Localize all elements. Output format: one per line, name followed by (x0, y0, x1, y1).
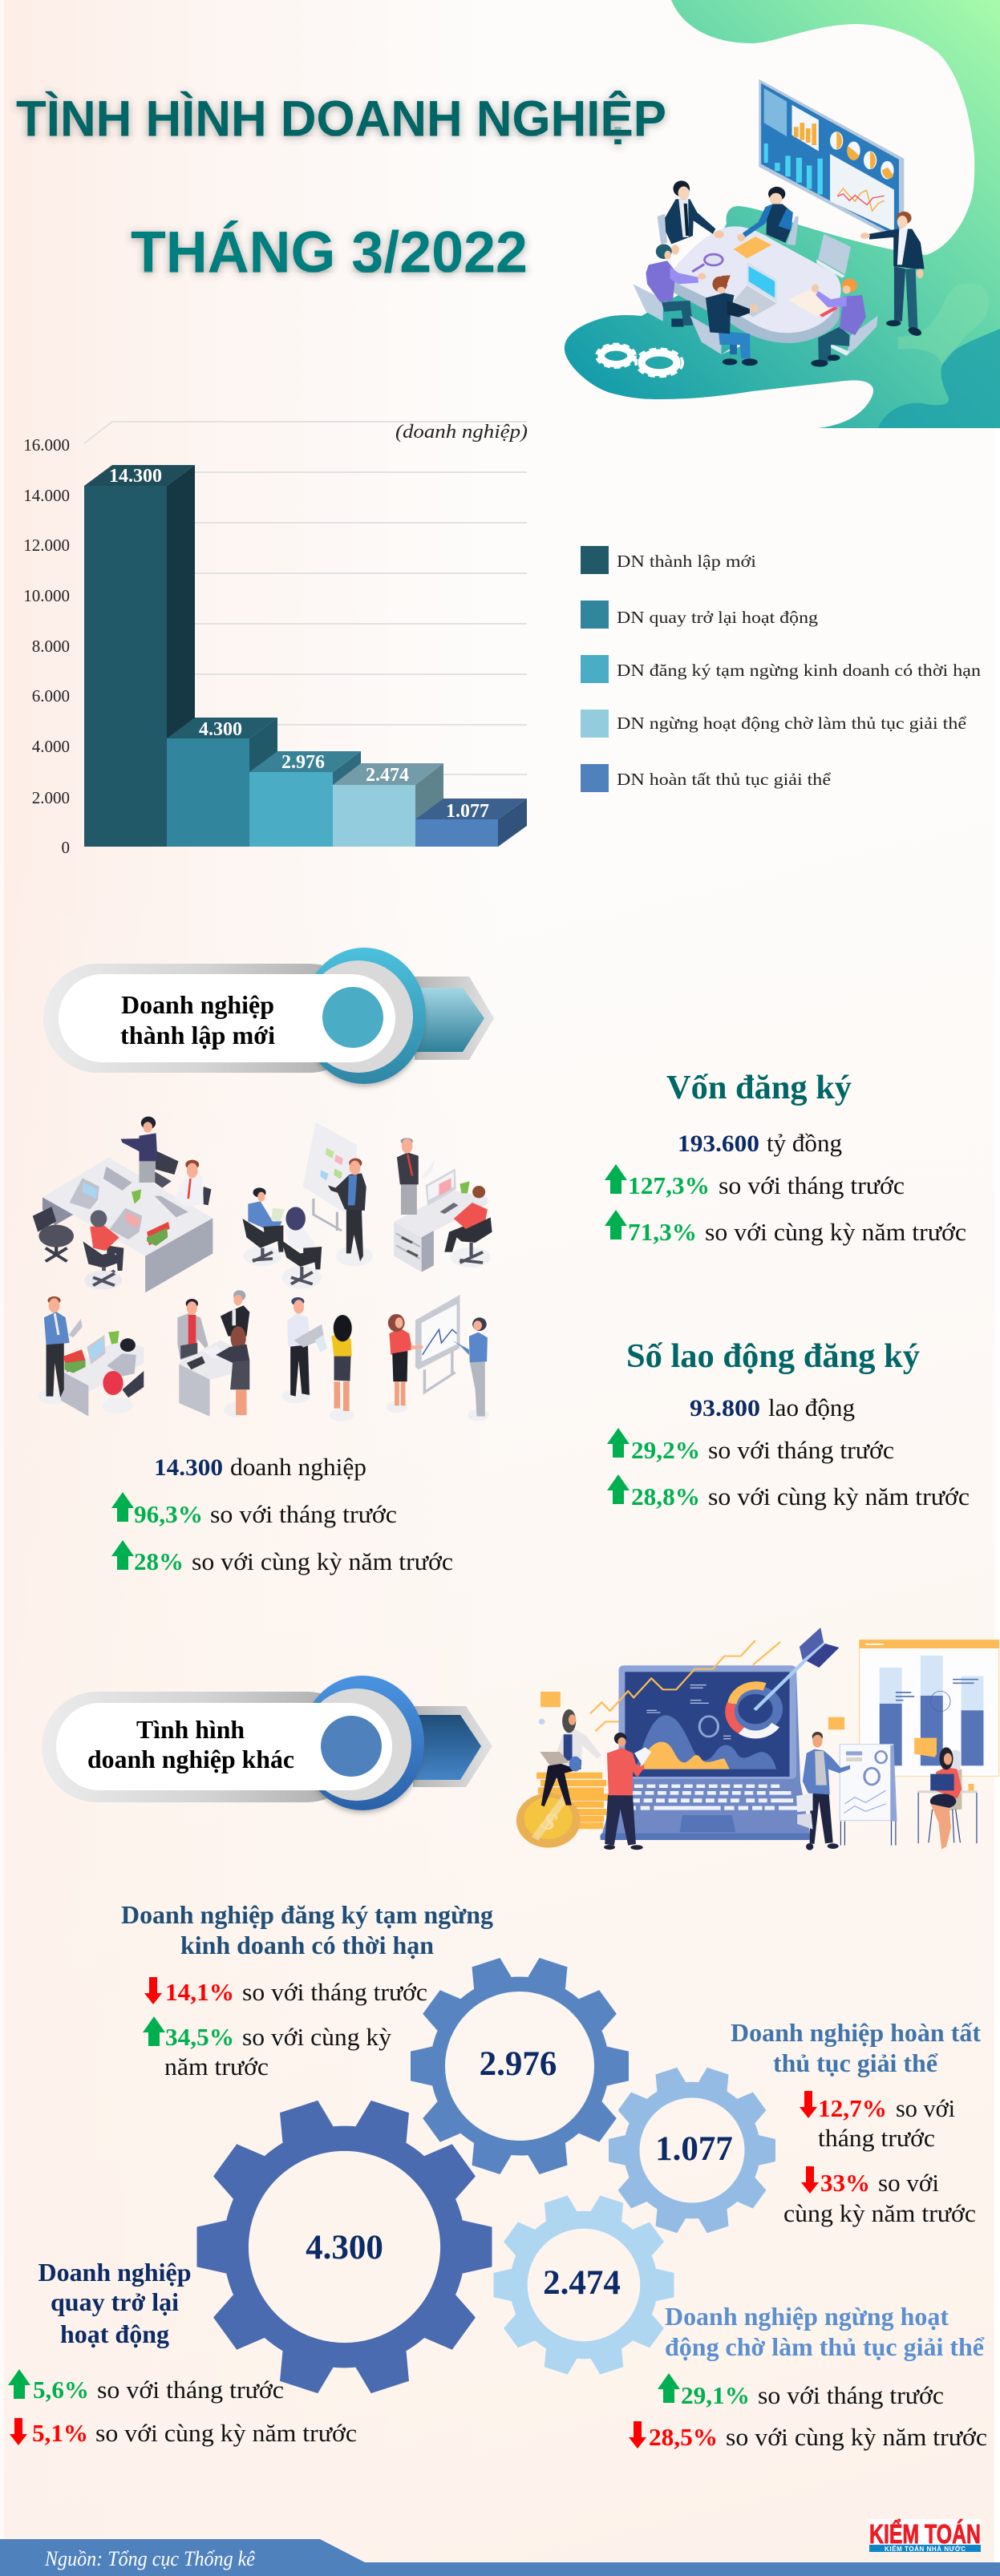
block: ngừng hoạt động chờ giải thể (629, 2302, 987, 2451)
stat: 28,8% (607, 1474, 970, 1510)
icon: seated man top (737, 187, 799, 245)
value: 14.300 (154, 1454, 223, 1481)
axis labels: 14.000 (23, 486, 70, 505)
value: 93.800 (690, 1395, 760, 1421)
data labels: 2.474 (366, 765, 409, 786)
stat: 12,7%: so với (896, 2094, 955, 2122)
stat: 96,3%: 96,3% (134, 1500, 203, 1528)
icon: presenter and flipchart (796, 1717, 897, 1850)
stat: 33%: cùng kỳ năm trước (783, 2199, 976, 2227)
stat: 96,3%: so với tháng trước (210, 1500, 397, 1528)
value (154, 1453, 366, 1481)
gear numbers: 2.976 (480, 2045, 557, 2083)
icon: chart board with two women (387, 1295, 489, 1421)
data labels: 1.077 (446, 801, 489, 822)
stat: 127,3% (605, 1164, 905, 1199)
data labels: 2.976 (281, 752, 325, 773)
section badge: Tình hình doanh nghiệp khác (42, 1676, 492, 1810)
bar: 2.474 (333, 763, 443, 847)
icon: seated woman at desk (914, 1738, 978, 1850)
heading: Doanh nghiệp ngừng hoạt (665, 2302, 949, 2331)
chart: 3D bar chart of enterprises (23, 422, 528, 857)
value: lao động (768, 1393, 855, 1421)
axis labels: 16.000 (23, 435, 70, 455)
heading: thủ tục giải thể (773, 2048, 938, 2077)
bar: 4.300 (167, 718, 277, 847)
title line 2 reflection (141, 269, 528, 273)
gear: 2.474 (494, 2194, 674, 2376)
legend: DN đăng ký tạm ngừng kinh doanh có thời hạn (617, 661, 982, 680)
axis labels: 2.000 (32, 788, 70, 807)
stat: 29,2% (607, 1428, 894, 1464)
arrow (415, 977, 494, 1060)
stat: 96,3% (111, 1492, 397, 1528)
badge text (120, 990, 275, 1049)
heading (121, 1900, 493, 1959)
icon: big chart board (860, 1640, 999, 1776)
legend: DN quay trở lại hoạt động (617, 608, 819, 627)
axis labels: 10.000 (23, 586, 70, 605)
axis labels: 4.000 (32, 737, 70, 756)
data labels: 4.300 (199, 719, 242, 740)
data labels: 14.300 (109, 466, 162, 487)
axis labels: 6.000 (32, 686, 70, 706)
badge text (87, 1715, 294, 1773)
heading: động chờ làm thủ tục giải thể (665, 2332, 985, 2361)
stat: 28,5%: so với cùng kỳ năm trước (726, 2423, 987, 2451)
heading (665, 2302, 985, 2361)
legend: DN hoàn tất thủ tục giải thể (617, 770, 832, 789)
icon: gears (597, 344, 682, 377)
stat: 127,3%: 127,3% (628, 1171, 710, 1199)
stat: 28,8%: so với cùng kỳ năm trước (708, 1482, 970, 1510)
legend: DN ngừng hoạt động chờ làm thủ tục giải thể (617, 714, 967, 733)
block: Số lao động đăng ký (607, 1338, 970, 1510)
arrow (413, 1706, 492, 1787)
heading: hoạt động (60, 2319, 169, 2348)
keyboard keys (619, 1785, 797, 1810)
block: tạm ngừng kinh doanh (121, 1900, 493, 2081)
badge text: Doanh nghiệp (121, 990, 274, 1019)
stat: 14,1% (144, 1977, 427, 2006)
heading: Vốn đăng ký (666, 1070, 852, 1106)
icon: man and woman with tablets (281, 1297, 354, 1421)
unit label: (doanh nghiệp) (395, 422, 528, 443)
stat: 5,6%: so với tháng trước (97, 2376, 284, 2404)
illustration: office people (33, 1117, 492, 1421)
icon: office desk group (33, 1117, 213, 1292)
icon: desk with computer and man in red (394, 1138, 492, 1272)
chart grid lines (84, 422, 527, 774)
stat: 33% (783, 2166, 976, 2227)
block: 14.300 doanh nghiệp (111, 1453, 453, 1575)
value (678, 1129, 842, 1157)
source note: Nguồn: Tổng cục Thống kê (44, 2547, 255, 2570)
section badge: Doanh nghiệp thành lập mới (43, 948, 494, 1084)
stat: 28%: 28% (134, 1547, 184, 1575)
stat: 12,7% (800, 2091, 955, 2152)
stat: 29,1% (658, 2373, 944, 2409)
icon: coins and woman: $ (536, 1808, 563, 1837)
icon: seated man left, purple (633, 244, 706, 327)
legend (581, 546, 982, 792)
icon: laptop (600, 1665, 812, 1840)
block: quay trở lại hoạt động (8, 2258, 357, 2447)
value: tỷ đồng (767, 1129, 842, 1157)
axis labels (23, 435, 70, 857)
value: 193.600 (678, 1130, 759, 1157)
stat: 14,1%: so với tháng trước (242, 1978, 427, 2006)
gear: 1.077 (609, 2066, 775, 2234)
icon: seated woman right, purple (811, 278, 878, 367)
stat: 28,5% (629, 2421, 987, 2451)
stat: 29,2%: so với tháng trước (708, 1436, 894, 1464)
title line 1 reflection (26, 127, 646, 136)
gear numbers: 4.300 (306, 2229, 383, 2267)
icon: empty chair (816, 234, 851, 278)
stat: 34,5% (143, 2016, 391, 2081)
icon: rising line and arrow (590, 1628, 839, 1731)
title line 1: TÌNH HÌNH DOANH NGHIỆP (16, 91, 666, 147)
gear numbers: 2.474 (543, 2264, 621, 2302)
illustration: laptop analytics team (516, 1628, 999, 1850)
stat: 14,1%: 14,1% (165, 1978, 234, 2006)
stat: 34,5%: so với cùng kỳ (242, 2023, 391, 2051)
stat: 28,8%: 28,8% (631, 1482, 700, 1510)
stat: 29,2%: 29,2% (631, 1436, 700, 1464)
heading: Doanh nghiệp (38, 2258, 191, 2287)
bar: 1.077 (415, 799, 527, 847)
bar: 14.300 (84, 465, 195, 847)
heading: kinh doanh có thời hạn (180, 1931, 434, 1959)
value (690, 1393, 855, 1421)
icon: seated man front with laptop (690, 275, 759, 366)
heading (731, 2018, 981, 2077)
icon: standing man left (658, 180, 724, 255)
badge text: thành lập mới (120, 1021, 275, 1049)
value: doanh nghiệp (230, 1453, 366, 1481)
data labels (109, 466, 489, 822)
heading: Doanh nghiệp hoàn tất (731, 2018, 981, 2047)
heading (38, 2258, 191, 2348)
stat: 71,3% (605, 1210, 966, 1246)
stat: 28%: so với cùng kỳ năm trước (192, 1547, 453, 1575)
axis labels: 12.000 (23, 536, 70, 555)
icon: man and woman at desk (38, 1296, 144, 1417)
stat: 29,1%: so với tháng trước (758, 2381, 944, 2409)
stat: 33%: 33% (820, 2169, 870, 2197)
illustration: meeting around table (597, 79, 925, 377)
bar: 2.976 (249, 751, 361, 847)
stat: 12,7%: tháng trước (818, 2124, 935, 2152)
icon: dashboard screen (759, 79, 904, 241)
icon: man in red (604, 1733, 651, 1850)
heading: Số lao động đăng ký (626, 1338, 920, 1375)
axis labels: 8.000 (32, 637, 70, 656)
legend: DN thành lập mới (617, 552, 756, 571)
icon: whiteboard group (242, 1122, 373, 1288)
stat: 5,1%: so với cùng kỳ năm trước (95, 2419, 357, 2447)
stat: 127,3%: so với tháng trước (719, 1171, 905, 1199)
icon: coins and woman (516, 1692, 608, 1848)
stat: 5,6%: 5,6% (33, 2376, 89, 2404)
stat: 71,3%: 71,3% (628, 1218, 697, 1246)
hero green wave background (565, 0, 1000, 428)
title line 2: THÁNG 3/2022 (131, 220, 528, 285)
stat: 28% (111, 1540, 453, 1575)
stat: 5,6% (8, 2369, 284, 2404)
block: Vốn đăng ký (605, 1070, 966, 1246)
stat: 29,1%: 29,1% (681, 2381, 750, 2409)
icon: group of three at counter (177, 1290, 249, 1417)
stat: 5,1%: 5,1% (32, 2419, 88, 2447)
block: hoàn tất thủ tục giải thể (731, 2018, 981, 2227)
stat: 28,5%: 28,5% (649, 2423, 718, 2451)
stat: 34,5%: 34,5% (165, 2023, 234, 2051)
logo: Kiểm Toán: KIỂM TOÁN NHÀ NƯỚC (885, 2546, 966, 2553)
footer bar (0, 2539, 1000, 2576)
gear numbers (306, 2045, 733, 2302)
stat: 33%: so với (878, 2169, 939, 2197)
badge text: Tình hình (136, 1715, 245, 1744)
icon: table (672, 226, 841, 343)
axis labels: 0 (61, 838, 70, 857)
heading: Doanh nghiệp đăng ký tạm ngừng (121, 1900, 493, 1929)
stat: 34,5%: năm trước (164, 2052, 269, 2081)
stat: 12,7%: 12,7% (818, 2094, 887, 2122)
gear: 2.976 (411, 1956, 629, 2176)
heading: quay trở lại (51, 2287, 179, 2316)
gear numbers: 1.077 (655, 2130, 733, 2168)
icon: standing presenter (860, 212, 925, 338)
gear: 4.300 (197, 2098, 492, 2396)
badge text: doanh nghiệp khác (87, 1745, 294, 1773)
stat: 71,3%: so với cùng kỳ năm trước (705, 1218, 966, 1246)
